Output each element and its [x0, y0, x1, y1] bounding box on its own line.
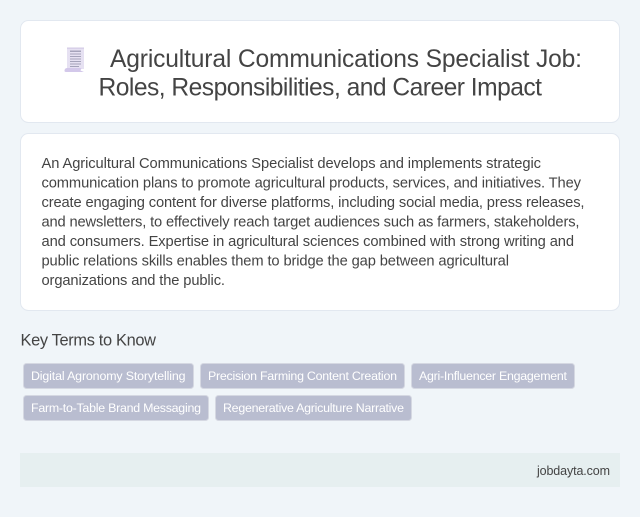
tag: precision farming [200, 364, 404, 388]
tag: farm-to-table [24, 396, 208, 420]
tag: precision farming: Precision Farming Content Creation [208, 369, 397, 383]
title text [98, 46, 582, 102]
tag: digital agronomy: Digital Agronomy Storytelling [31, 369, 186, 383]
tag: agri-influencer [412, 364, 574, 388]
description text: create engaging content for diverse platforms, including social media, press releases, [42, 195, 584, 211]
heading: key terms: Key Terms to Know [20, 332, 156, 350]
panel: description [20, 134, 620, 310]
description text: public relations skills enables them to bridge the gap between agricultural [42, 254, 509, 270]
description text: organizations and the public. [42, 273, 225, 289]
footer bar: jobdayta.com [536, 464, 610, 478]
description text: communication plans to promote agricultural products, services, and initiatives. They [42, 176, 582, 192]
tag: digital agronomy [24, 364, 194, 388]
description text: An Agricultural Communications Specialist develops and implements strategic [42, 156, 541, 172]
title text: Agricultural Communications Specialist Job: [110, 46, 582, 73]
tag: agri-influencer: Agri-Influencer Engagement [419, 369, 568, 383]
description text [42, 156, 584, 289]
description text: and newsletters, to effectively reach target audiences such as farmers, stakeholders, [42, 214, 580, 230]
title text: Roles, Responsibilities, and Career Impact [98, 74, 542, 102]
tag: regenerative agriculture: Regenerative Agriculture Narrative [223, 401, 404, 415]
tag: farm-to-table: Farm-to-Table Brand Messaging [31, 401, 201, 415]
panel: title [20, 20, 620, 122]
icon: document scroll [64, 48, 84, 72]
footer bar [20, 453, 620, 487]
tag: regenerative agriculture [216, 396, 412, 420]
key term tags [24, 364, 574, 420]
description text: and consumers. Expertise in agricultural sciences combined with strong writing and [42, 234, 574, 250]
